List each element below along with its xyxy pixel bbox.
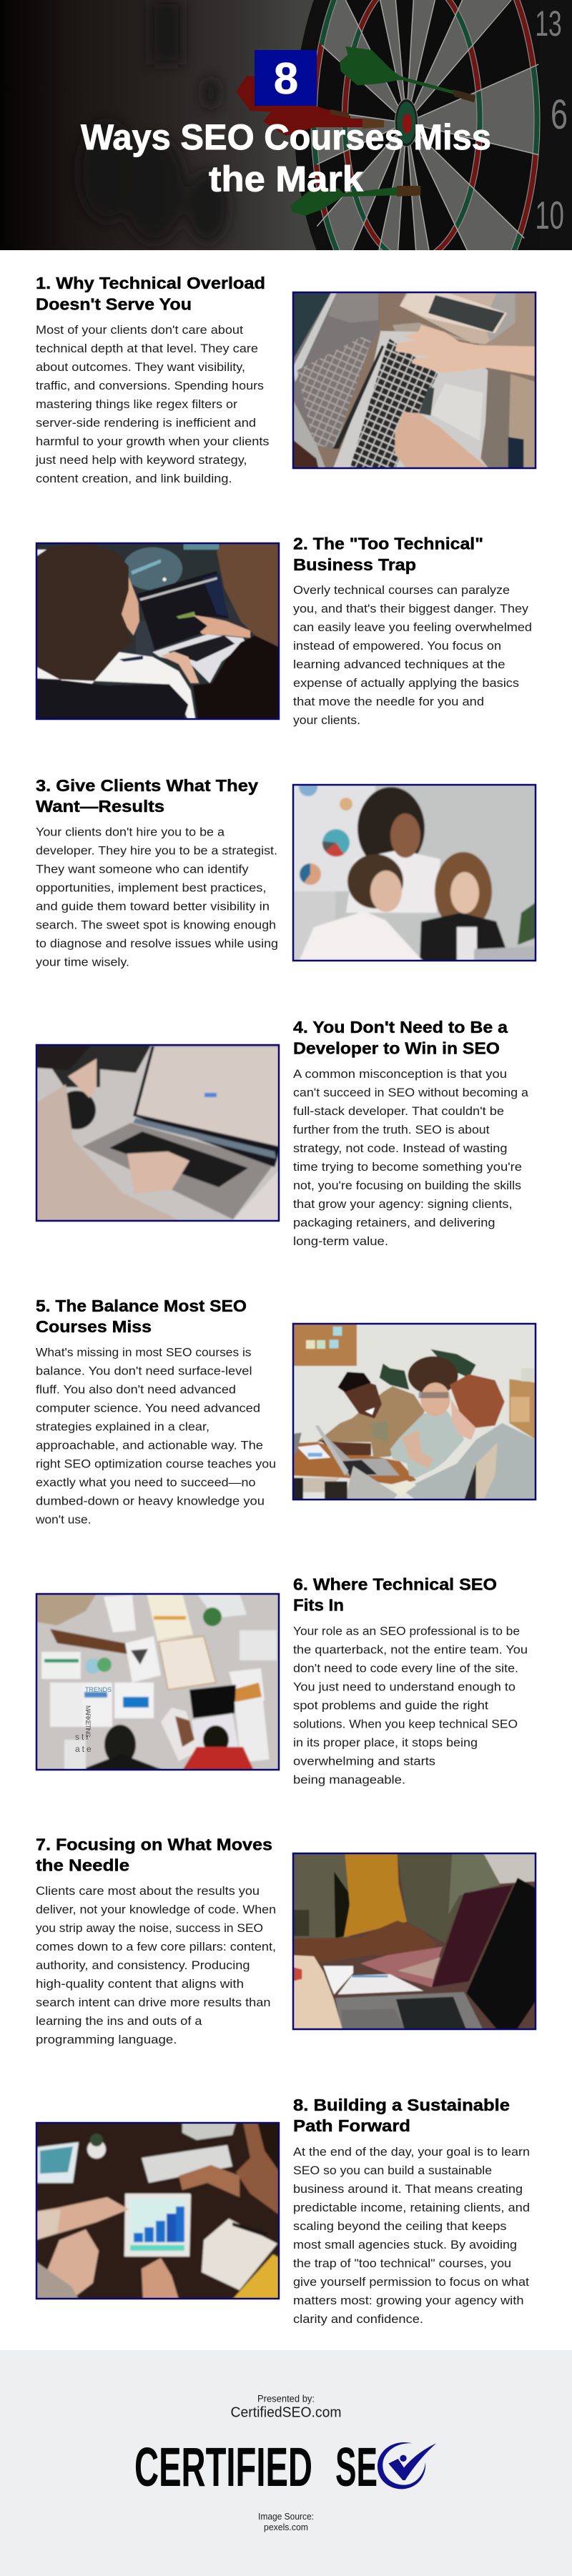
body text 2: expense of actually applying the basics <box>293 677 519 690</box>
number badge <box>255 50 317 106</box>
image source <box>258 2511 314 2532</box>
body text 3 <box>36 826 278 969</box>
body text 8: SEO so you can build a sustainable <box>293 2164 492 2177</box>
image source: pexels.com <box>264 2522 308 2532</box>
body text 4: further from the truth. SEO is about <box>293 1124 490 1136</box>
body text 5: What's missing in most SEO courses is <box>36 1347 252 1359</box>
heading 5: Courses Miss <box>36 1317 152 1336</box>
body text 1: content creation, and link building. <box>36 472 232 485</box>
body text 3: your time wisely. <box>36 956 129 969</box>
heading 2: Business Trap <box>293 555 416 574</box>
body text 5: right SEO optimization course teaches you <box>36 1458 276 1471</box>
body text 6: spot problems and guide the right <box>293 1700 488 1713</box>
body text 5: approachable, and actionable way. The <box>36 1440 263 1452</box>
title: the Mark <box>209 159 363 199</box>
presented by: CertifiedSEO.com <box>230 2404 342 2420</box>
body text 2: learning advanced techniques at the <box>293 658 505 671</box>
body text 4: full-stack developer. That couldn't be <box>293 1105 504 1118</box>
body text 5: strategies explained in a clear, <box>36 1421 209 1434</box>
body text 3: Your clients don't hire you to be a <box>36 826 225 839</box>
panel: section 6 <box>36 1575 528 1787</box>
photo labels: TRENDS <box>85 1686 112 1693</box>
body text 1: technical depth at that level. They care <box>36 342 258 355</box>
photo: two women at laptop <box>36 543 280 720</box>
dart: red darts <box>236 76 384 136</box>
body text 4: strategy, not code. Instead of wasting <box>293 1142 508 1155</box>
dart: green lower <box>291 186 420 216</box>
body text 7 <box>36 1885 276 2046</box>
presented by: Presented by: <box>257 2393 315 2404</box>
photo: three colleagues laughing at table <box>292 1323 536 1500</box>
body text 1: harmful to your growth when your clients <box>36 435 269 448</box>
body text 5: exactly what you need to succeed—no <box>36 1477 256 1490</box>
heading 5: 5. The Balance Most SEO <box>36 1297 247 1315</box>
title: Ways SEO Courses Miss <box>81 117 491 157</box>
body text 3: search. The sweet spot is knowing enough <box>36 919 276 932</box>
panel: section 1 <box>35 274 536 485</box>
body text 5: dumbed-down or heavy knowledge you <box>36 1495 265 1508</box>
body text 2: you, and that's their biggest danger. They <box>293 603 529 615</box>
heading 4 <box>293 1018 508 1058</box>
body text 6: in its proper place, it stops being <box>293 1737 478 1750</box>
body text 6: solutions. When you keep technical SEO <box>293 1718 518 1731</box>
image source: Image Source: <box>258 2511 314 2522</box>
body text 7: comes down to a few core pillars: content, <box>36 1941 276 1953</box>
photo: hands on laptop, mustard shirt <box>292 1853 536 2030</box>
photo: hands typing on laptop <box>292 292 536 469</box>
body text 8: predictable income, retaining clients, and <box>293 2201 530 2214</box>
bullseye <box>395 99 418 147</box>
body text 1: just need help with keyword strategy, <box>35 454 247 467</box>
heading 5 <box>36 1297 247 1336</box>
body text 6: don't need to code every line of the site. <box>293 1663 518 1675</box>
panel: section 8 <box>36 2096 530 2326</box>
body text 6: the quarterback, not the entire team. You <box>293 1644 528 1657</box>
photo labels: ate <box>75 1744 94 1754</box>
body text 6: overwhelming and starts <box>293 1755 435 1768</box>
body text 2: instead of empowered. You focus on <box>293 640 501 653</box>
panel: footer <box>0 2350 572 2576</box>
photo labels <box>75 1686 112 1754</box>
body text 3: opportunities, implement best practices, <box>36 882 266 895</box>
body text 5: computer science. You need advanced <box>36 1402 260 1415</box>
panel: section 2 <box>36 535 532 727</box>
icon: check mark in circle <box>378 2442 436 2489</box>
logo: Certified SEO: CERTIFIED <box>134 2437 312 2498</box>
body text 4: can't succeed in SEO without becoming a <box>293 1086 529 1099</box>
heading 1: Doesn't Serve You <box>36 294 192 313</box>
body text 5: balance. You don't need surface-level <box>36 1365 252 1378</box>
body text 7: deliver, not your knowledge of code. When <box>36 1903 276 1916</box>
body text 6 <box>293 1625 528 1787</box>
body text 8: matters most: growing your agency with <box>293 2294 523 2307</box>
body text 4 <box>293 1068 529 1248</box>
body text 2: that move the needle for you and <box>293 695 484 708</box>
hero banner with dartboard photo <box>0 0 572 250</box>
number badge: 8 <box>274 54 298 104</box>
body text 4: A common misconception is that you <box>293 1068 507 1081</box>
panel: section 3 <box>36 776 536 969</box>
body text 7: learning the ins and outs of a <box>36 2015 202 2028</box>
panel: section 7 <box>36 1836 536 2046</box>
body text 8: scaling beyond the ceiling that keeps <box>293 2220 506 2233</box>
photo labels: MARKETING <box>84 1705 92 1738</box>
heading 3: 3. Give Clients What They <box>36 776 258 795</box>
body text 3: and guide them toward better visibility in <box>36 901 270 913</box>
heading 8: Path Forward <box>293 2116 410 2135</box>
heading 1: 1. Why Technical Overload <box>36 274 265 292</box>
body text 8: give yourself permission to focus on what <box>293 2276 529 2289</box>
body text 7: high-quality content that aligns with <box>36 1978 244 1991</box>
panel: section 4 <box>36 1018 529 1248</box>
title <box>81 117 491 199</box>
photo: person using laptop <box>36 1044 280 1222</box>
body text 5 <box>35 1347 276 1527</box>
heading 7 <box>36 1836 272 1874</box>
board numbers <box>536 11 566 229</box>
logo: Certified SEO: SE <box>335 2437 378 2498</box>
body text 7: authority, and consistency. Producing <box>36 1959 250 1972</box>
body text 4: packaging retainers, and delivering <box>293 1217 495 1229</box>
body text 2 <box>293 584 532 727</box>
body text 6: being manageable. <box>293 1774 405 1787</box>
body text 5: won't use. <box>35 1514 91 1527</box>
dart: green upper <box>340 46 475 102</box>
heading 6 <box>293 1575 497 1614</box>
body text 3: developer. They hire you to be a strategist. <box>36 845 277 858</box>
body text 1: about outcomes. They want visibility, <box>36 361 245 374</box>
body text 6: Your role as an SEO professional is to be <box>293 1625 520 1638</box>
body text 1: server-side rendering is inefficient and <box>36 417 256 430</box>
body text 7: you strip away the noise, success in SEO <box>36 1922 263 1935</box>
photo labels: str <box>75 1732 91 1742</box>
body text 8: At the end of the day, your goal is to learn <box>293 2146 530 2159</box>
photo: tablet with bar chart on desk <box>36 2122 280 2299</box>
body text 1 <box>35 324 269 485</box>
heading 7: 7. Focusing on What Moves <box>36 1836 272 1854</box>
heading 4: 4. You Don't Need to Be a <box>293 1018 508 1036</box>
body text 4: time trying to become something you're <box>293 1161 522 1174</box>
heading 2 <box>293 535 483 574</box>
body text 3: to diagnose and resolve issues while using <box>36 938 278 951</box>
heading 8 <box>293 2096 510 2135</box>
photo: three women smiling <box>292 778 536 961</box>
presented by <box>230 2393 342 2420</box>
body text 8: most small agencies stuck. By avoiding <box>293 2239 517 2251</box>
body text 2: Overly technical courses can paralyze <box>293 584 510 597</box>
heading 1 <box>36 274 265 313</box>
body text 8: business around it. That means creating <box>293 2183 523 2196</box>
body text 6: You just need to understand enough to <box>293 1681 516 1694</box>
body text 7: Clients care most about the results you <box>36 1885 260 1898</box>
body text 1: Most of your clients don't care about <box>36 324 243 337</box>
body text 4: long-term value. <box>293 1235 388 1248</box>
heading 6: Fits In <box>293 1595 344 1614</box>
body text 7: search intent can drive more results than <box>36 1996 270 2009</box>
body text 4: that grow your agency: signing clients, <box>293 1198 512 1211</box>
heading 8: 8. Building a Sustainable <box>293 2096 510 2114</box>
body text 7: programming language. <box>36 2033 177 2046</box>
body text 2: your clients. <box>293 714 360 727</box>
body text 5: fluff. You also don't need advanced <box>36 1384 236 1397</box>
body text 4: not, you're focusing on building the skills <box>293 1179 521 1192</box>
heading 4: Developer to Win in SEO <box>293 1039 500 1058</box>
body text 1: mastering things like regex filters or <box>36 398 238 411</box>
body text 8 <box>293 2146 530 2326</box>
body text 8: the trap of "too technical" courses, you <box>293 2257 511 2270</box>
heading 7: the Needle <box>36 1856 129 1874</box>
heading 3 <box>36 776 258 816</box>
heading 2: 2. The "Too Technical" <box>293 535 483 553</box>
heading 3: Want—Results <box>36 797 164 816</box>
panel: section 5 <box>35 1297 536 1527</box>
body text 8: clarity and confidence. <box>293 2313 423 2326</box>
heading 6: 6. Where Technical SEO <box>293 1575 497 1594</box>
body text 1: traffic, and conversions. Spending hours <box>36 380 264 392</box>
photo: marketing documents on table <box>36 1593 280 1770</box>
body text 3: They want someone who can identify <box>36 863 249 876</box>
body text 2: can easily leave you feeling overwhelmed <box>293 621 532 634</box>
